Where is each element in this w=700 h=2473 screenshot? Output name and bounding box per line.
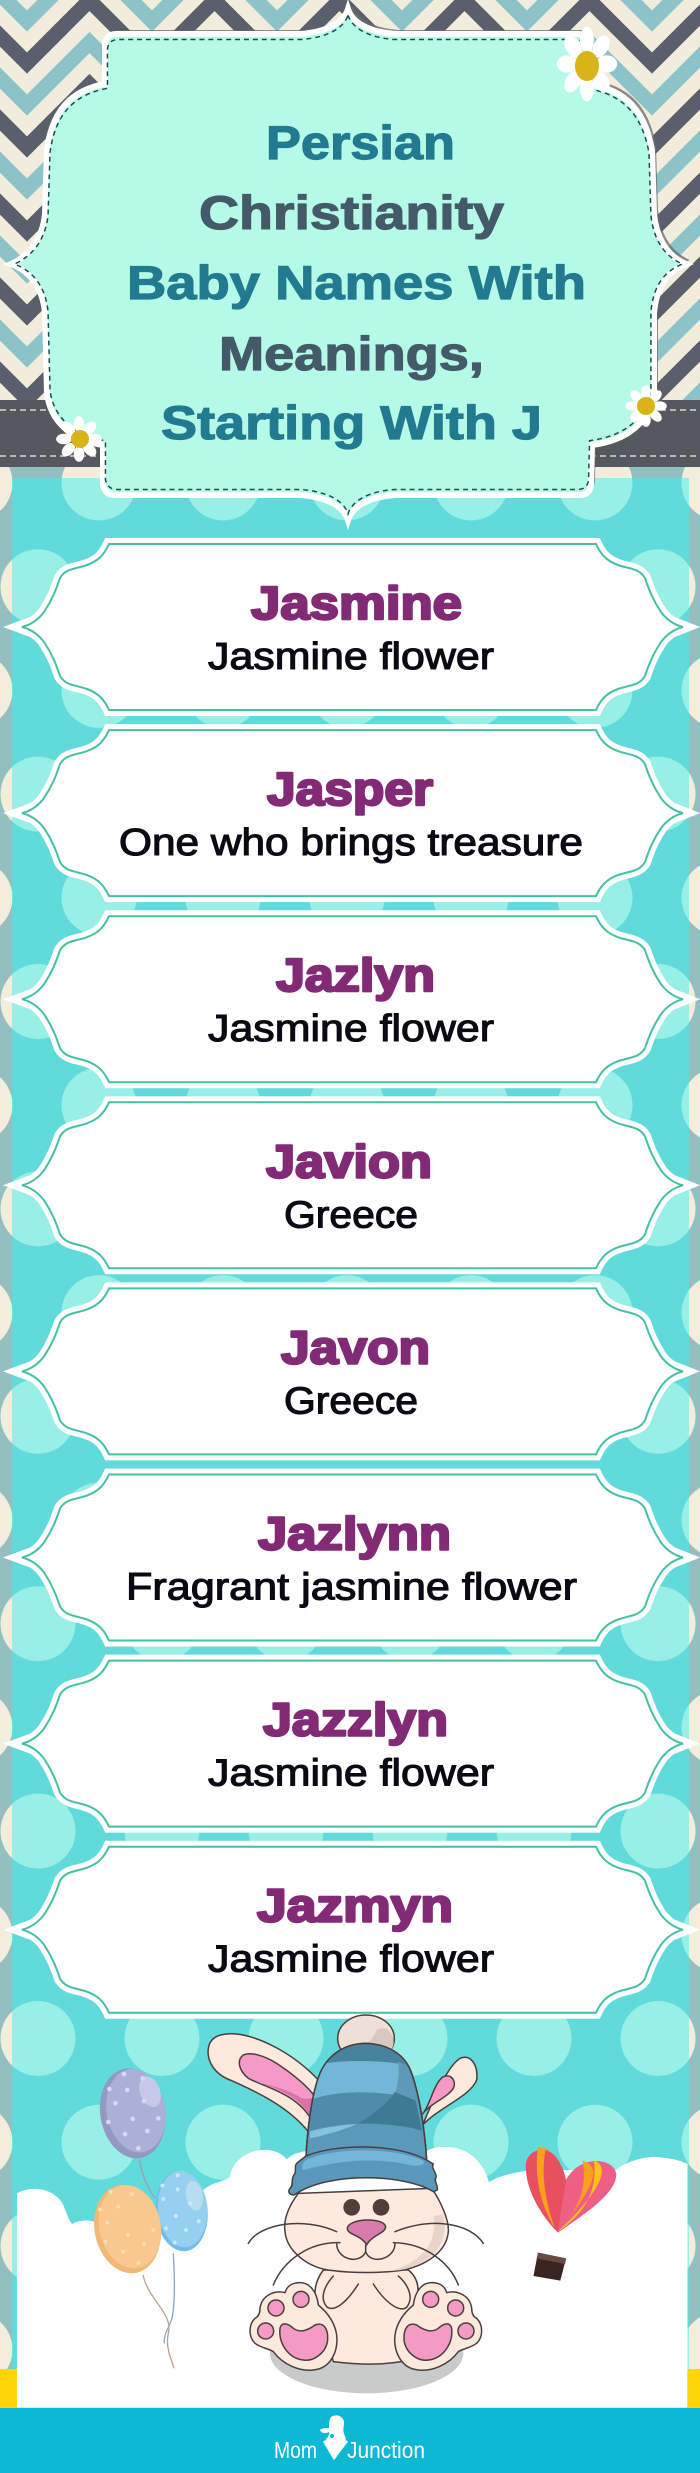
name: Javion <box>266 1135 432 1187</box>
meaning: Jasmine flower <box>208 636 494 678</box>
balloons <box>86 2063 211 2368</box>
balloon: orange <box>86 2179 174 2368</box>
balloon: purple <box>93 2063 172 2198</box>
title: Meanings, <box>219 327 484 380</box>
title <box>127 116 586 449</box>
left ear <box>208 2034 318 2132</box>
title: Christianity <box>199 186 504 239</box>
white clouds <box>17 2147 688 2408</box>
logo: MomJunction: Mom <box>274 2437 317 2463</box>
hat brim <box>289 2147 437 2195</box>
icon: daisy top right <box>557 27 617 101</box>
icon: daisy right <box>625 385 667 427</box>
arms <box>323 2276 410 2309</box>
bunny <box>208 2015 483 2393</box>
background: teal polka dot panel <box>12 478 689 2473</box>
card: Jazlynn <box>3 1474 700 1640</box>
yellow corner strip right <box>688 2369 700 2408</box>
name: Javon <box>281 1321 430 1373</box>
mouth and whiskers <box>248 2223 483 2285</box>
logo: MomJunction: Junction <box>347 2437 425 2463</box>
eyes <box>343 2199 389 2216</box>
nose <box>347 2220 386 2245</box>
body <box>315 2270 418 2364</box>
right foot <box>395 2283 482 2370</box>
striped hat <box>306 2043 427 2160</box>
name: Jazzlyn <box>263 1694 448 1746</box>
title: Starting With J <box>161 396 542 449</box>
title: Persian <box>266 116 455 169</box>
icon: daisy bottom left <box>56 416 102 462</box>
meaning: Jasmine flower <box>208 1939 494 1981</box>
yellow corner strip left <box>0 2369 17 2408</box>
meaning: One who brings treasure <box>119 822 583 864</box>
name: Jazlyn <box>276 949 435 1001</box>
card: Jazmyn <box>3 1847 700 2013</box>
logo: MomJunction <box>274 2415 425 2463</box>
name: Jazmyn <box>257 1880 453 1932</box>
head <box>285 2188 448 2273</box>
meaning: Jasmine flower <box>208 1753 494 1795</box>
card: Jasper <box>3 730 700 896</box>
meaning: Greece <box>284 1380 418 1422</box>
card: Javion <box>3 1102 700 1268</box>
footer band <box>0 2408 700 2473</box>
right ear <box>422 2057 477 2125</box>
basket <box>533 2253 566 2281</box>
left foot <box>250 2283 337 2370</box>
title: Baby Names With <box>127 256 586 309</box>
ground shadow <box>270 2313 463 2393</box>
name: Jasmine <box>251 577 462 629</box>
name: Jasper <box>267 763 433 815</box>
meaning: Jasmine flower <box>208 1008 494 1050</box>
background: chevron pattern <box>0 0 700 400</box>
hot air balloon <box>526 2147 616 2281</box>
card: Jasmine <box>3 544 700 710</box>
card: Jazzlyn <box>3 1661 700 1827</box>
balloon: blue <box>152 2169 211 2343</box>
card: Javon <box>3 1288 700 1454</box>
gray stitched ribbon band <box>0 400 700 467</box>
pompom <box>338 2015 394 2062</box>
name: Jazlynn <box>258 1508 451 1560</box>
card: Jazlyn <box>3 916 700 1082</box>
heart envelope <box>526 2147 616 2233</box>
panel: title plaque <box>11 5 690 520</box>
meaning: Fragrant jasmine flower <box>126 1566 577 1608</box>
meaning: Greece <box>284 1194 418 1236</box>
logo icon: mother and child <box>320 2415 347 2459</box>
